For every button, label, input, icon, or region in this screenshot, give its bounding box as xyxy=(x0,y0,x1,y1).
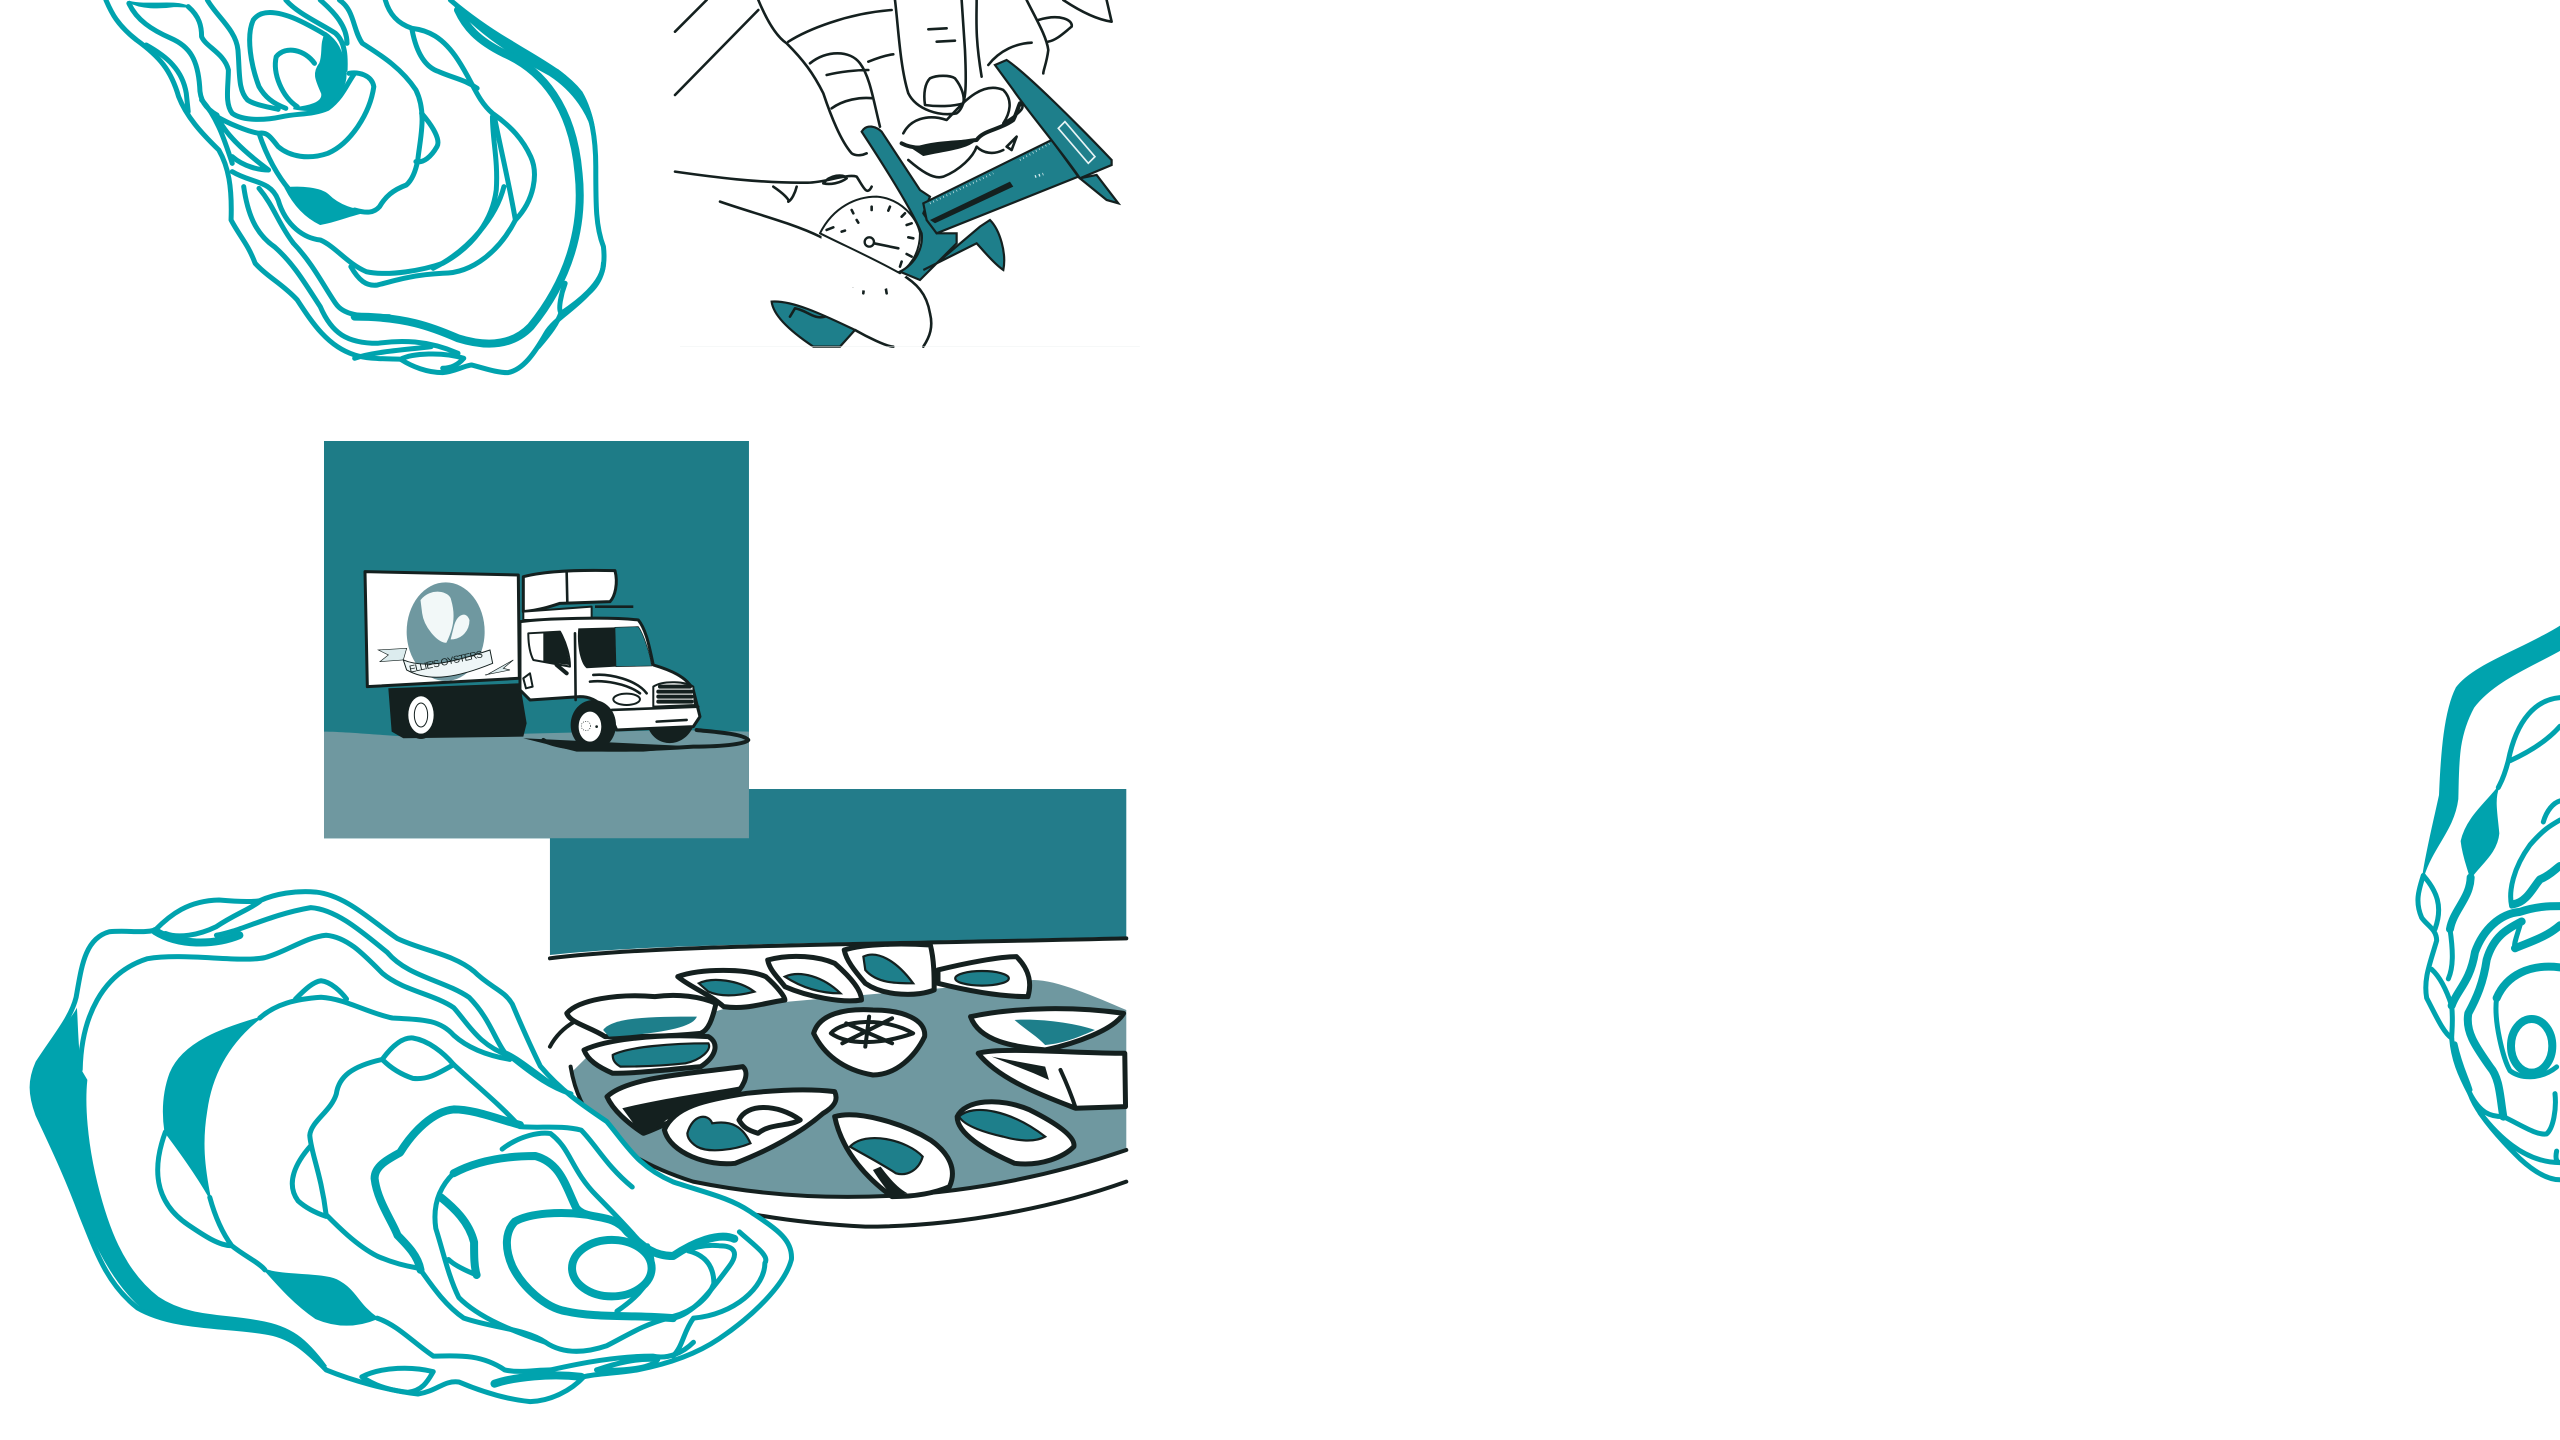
caliper dial xyxy=(820,192,920,291)
oyster outline: right edge xyxy=(2418,627,2560,1180)
ground xyxy=(324,730,749,838)
truck chassis and wheels xyxy=(388,683,748,752)
lemon bowl xyxy=(814,1010,925,1075)
oyster outline: top left xyxy=(106,0,604,373)
truck box with logo: ELLIE'S OYSTERS xyxy=(408,649,484,676)
illustration panel: oyster platter xyxy=(550,789,1126,1396)
truck box with logo xyxy=(365,572,519,687)
oysters on plate xyxy=(567,944,1126,1197)
illustration: hand measuring oyster with caliper xyxy=(675,0,1140,347)
truck cab xyxy=(520,570,700,750)
plate xyxy=(550,980,1126,1227)
oyster outline: bottom left xyxy=(32,892,792,1402)
illustration panel: delivery truck xyxy=(324,441,749,838)
